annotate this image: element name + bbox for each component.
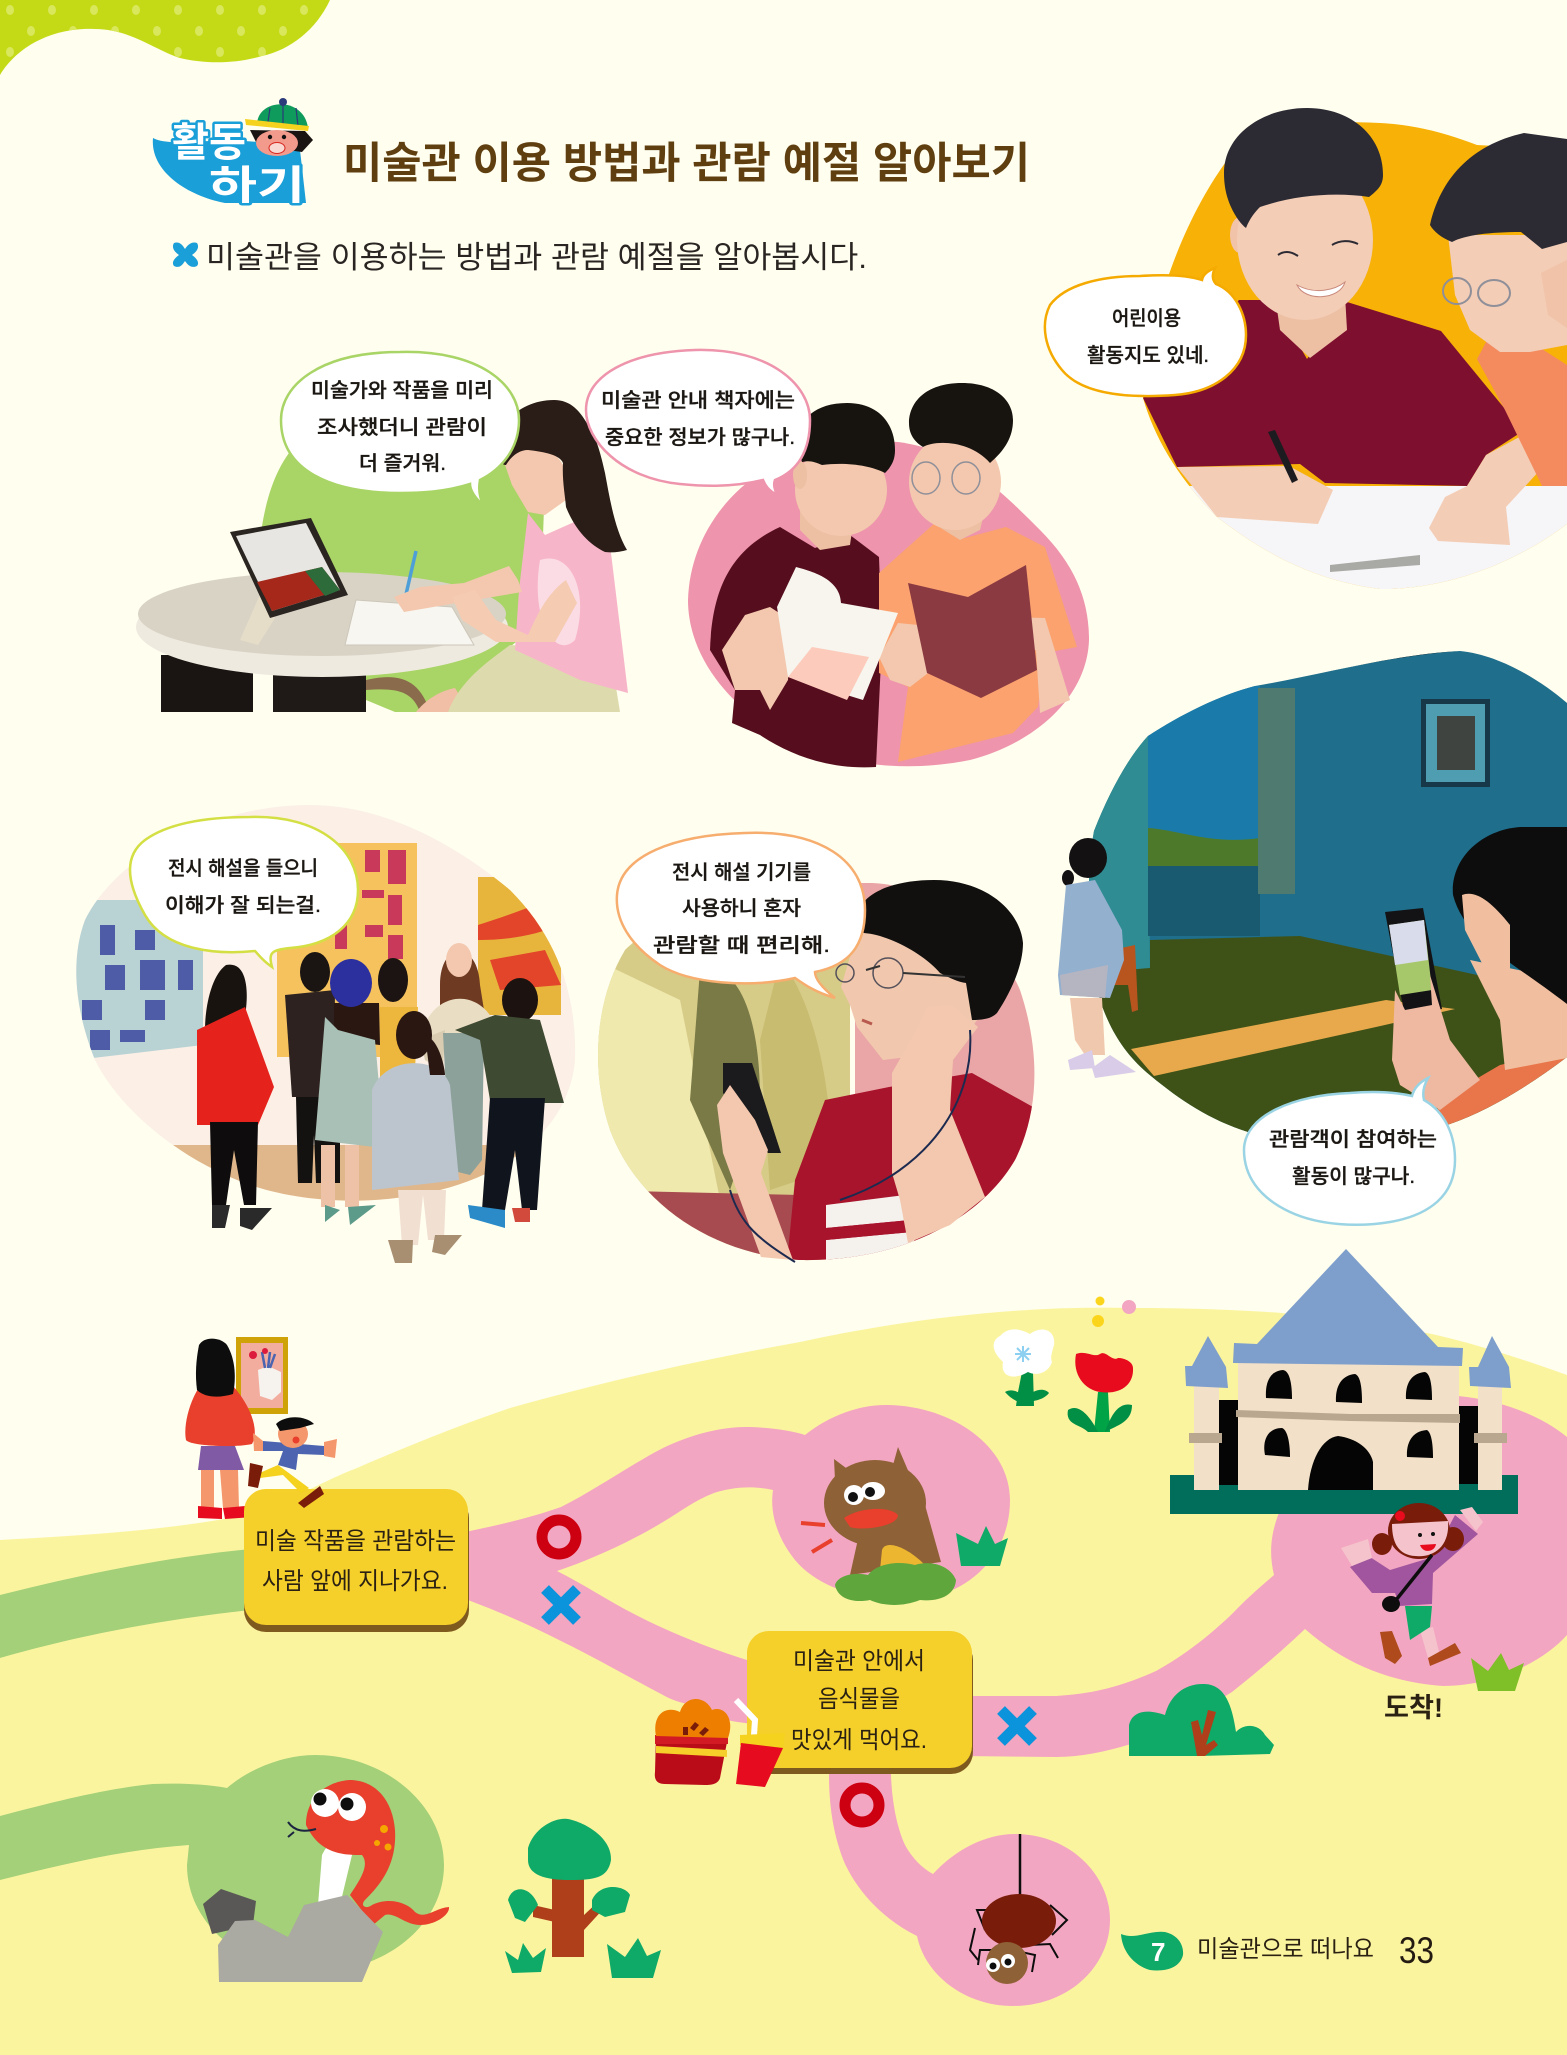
boy in camo sweater — [455, 978, 564, 1228]
green path upper — [0, 1549, 250, 1658]
boy one's shirt — [1143, 300, 1523, 486]
boy's red polo shirt — [787, 1073, 1033, 1262]
board game ground — [0, 1308, 1567, 2055]
speech bubble: audio guide device: 전시 해설 기기를 — [672, 861, 811, 884]
rocks — [203, 1889, 383, 1982]
arrival girl character — [1341, 1503, 1483, 1666]
castle base — [1170, 1475, 1518, 1514]
white open book — [777, 567, 898, 700]
main hall — [1238, 1362, 1459, 1490]
quiz box: eating in the museum: 맛있게 먹어요. — [791, 1727, 927, 1754]
girl writing — [394, 400, 628, 712]
boy one's arms — [1177, 466, 1333, 524]
gallery photo background — [60, 800, 590, 1210]
raised hand and arm — [892, 1005, 985, 1243]
teacher — [420, 943, 500, 1175]
mark: blue X, lower branch — [545, 1589, 577, 1621]
grass near arrival — [1471, 1653, 1524, 1691]
mark: red O, downward path — [845, 1788, 879, 1822]
speech bubble: guide booklet — [586, 350, 810, 495]
speech bubble: audio guide device — [617, 833, 865, 998]
boy one head — [1224, 108, 1383, 358]
speech bubble: guide booklet: 중요한 정보가 많구나. — [605, 426, 795, 449]
flower: red tulip — [1068, 1353, 1133, 1432]
child in navy hoodie — [285, 952, 340, 1183]
page number: 33 — [1399, 1930, 1434, 1971]
bush with branch — [1129, 1684, 1274, 1756]
speech bubble: audio guide explanation: 이해가 잘 되는걸. — [165, 894, 321, 917]
girl in grey dress — [372, 1011, 462, 1263]
subtitle: 미술관을 이용하는 방법과 관람 예절을 알아봅시다. — [206, 240, 867, 275]
boy with maroon shirt — [710, 403, 895, 767]
pink backdrop — [688, 441, 1089, 766]
panel: docent tour in the gallery — [60, 800, 590, 1263]
panel: researching on a tablet — [136, 400, 628, 712]
pen — [1268, 430, 1298, 483]
speech bubble: activity sheet: 활동지도 있네. — [1087, 344, 1209, 367]
subtitle icon: blue cross — [173, 243, 198, 267]
panel: participatory room — [1058, 640, 1567, 1140]
arrival-side castle — [1170, 1249, 1518, 1514]
woman viewing a painting — [185, 1337, 288, 1519]
quiz box: eating in the museum — [747, 1631, 973, 1774]
speech bubble: researching artists: 조사했더니 관람이 — [317, 416, 487, 439]
footer chapter title: 미술관으로 떠나요 — [1197, 1936, 1374, 1963]
running boy — [248, 1417, 337, 1508]
grass near dog — [956, 1526, 1008, 1566]
panel: boys filling in an activity sheet — [1140, 108, 1567, 606]
speech bubble: audio guide device: 사용하니 혼자 — [682, 897, 801, 920]
tablet — [230, 518, 348, 645]
child in blue hat — [315, 959, 380, 1225]
arrival label: 도착! — [1384, 1693, 1443, 1723]
speech bubble: researching artists: 더 즐거워. — [359, 452, 446, 475]
footer chapter number — [1121, 1932, 1183, 1970]
badge text: 하기 — [209, 164, 305, 208]
icon: boy with green hat — [245, 98, 313, 156]
clipped backdrop, desk and bodies — [1140, 120, 1567, 606]
speech bubble: activity sheet: 어린이용 — [1112, 307, 1181, 330]
quiz box: eating in the museum: 미술관 안에서 — [793, 1648, 925, 1675]
icon: fried chicken bucket — [655, 1699, 730, 1785]
pink board path — [460, 1396, 1567, 2006]
speech bubble: audio guide device: 관람할 때 편리해. — [653, 934, 830, 957]
mark: red O, upper branch — [542, 1520, 576, 1554]
title: 미술관 이용 방법과 관람 예절 알아보기 — [343, 140, 1030, 188]
child in back — [378, 958, 418, 1100]
speech bubble: participatory activities — [1244, 1078, 1455, 1225]
girl standing in the room — [1058, 838, 1136, 1078]
boy two head — [1430, 133, 1567, 352]
boy two's shirt — [1477, 331, 1567, 486]
green backdrop — [257, 440, 545, 712]
speech bubble: participatory activities: 활동이 많구나. — [1292, 1165, 1415, 1188]
spider character — [970, 1834, 1067, 1984]
boy with orange shirt — [879, 383, 1077, 762]
red guide book — [908, 565, 1037, 698]
windows and door — [1264, 1370, 1433, 1490]
quiz box: eating in the museum: 음식물을 — [818, 1686, 900, 1713]
badge text: 활동 — [172, 121, 246, 165]
snake character — [288, 1780, 449, 1925]
right tower — [1469, 1336, 1511, 1490]
clipboard clip — [1330, 555, 1420, 572]
icon: soft drink cup — [736, 1700, 785, 1787]
speech bubble: participatory activities: 관람객이 참여하는 — [1269, 1128, 1437, 1151]
speech bubble: activity sheet — [1045, 268, 1246, 396]
badge text — [172, 121, 305, 208]
chair — [1112, 945, 1138, 1012]
boy with smartphone — [1438, 1057, 1567, 1124]
quiz box: passing in front — [244, 1489, 469, 1632]
mark: blue X, right path — [1001, 1710, 1033, 1742]
table — [136, 572, 508, 712]
footer chapter number: 7 — [1151, 1937, 1165, 1967]
tree with grass — [505, 1819, 661, 1978]
painted room photo — [1085, 640, 1567, 1140]
orange backdrop — [1140, 120, 1567, 600]
corner decoration: green dotted blob — [0, 0, 330, 75]
left tower — [1185, 1336, 1228, 1490]
panel: two boys reading a guide — [688, 383, 1089, 767]
desk and paper — [1190, 486, 1567, 589]
boy's head — [1453, 827, 1567, 1004]
activity badge — [153, 98, 313, 208]
hands — [1392, 975, 1480, 1110]
green path lower — [0, 1755, 444, 1972]
speech bubble: researching artists: 미술가와 작품을 미리 — [311, 379, 493, 402]
speech bubble: guide booklet: 미술관 안내 책자에는 — [601, 389, 795, 412]
speech bubble: researching artists — [281, 352, 519, 505]
boy's head and face — [836, 880, 1023, 1060]
decorative dots — [1092, 1296, 1136, 1327]
quiz box: passing in front: 미술 작품을 관람하는 — [255, 1528, 456, 1555]
blue roof — [1233, 1249, 1463, 1366]
speech bubble: audio guide explanation — [130, 817, 358, 967]
panel: boy using audio guide — [590, 880, 1040, 1270]
quiz box: passing in front: 사람 앞에 지나가요. — [262, 1568, 448, 1595]
notebook and pen — [345, 551, 474, 645]
girl in red jacket — [197, 965, 274, 1230]
smartphone — [1385, 908, 1442, 1017]
flower: white blossom — [994, 1329, 1054, 1406]
audio device and hand — [717, 1030, 970, 1262]
blurred painting background — [590, 880, 1040, 1270]
growling dog character — [801, 1447, 956, 1605]
framed painting — [236, 1337, 288, 1414]
speech bubble: audio guide explanation: 전시 해설을 들으니 — [168, 857, 318, 880]
